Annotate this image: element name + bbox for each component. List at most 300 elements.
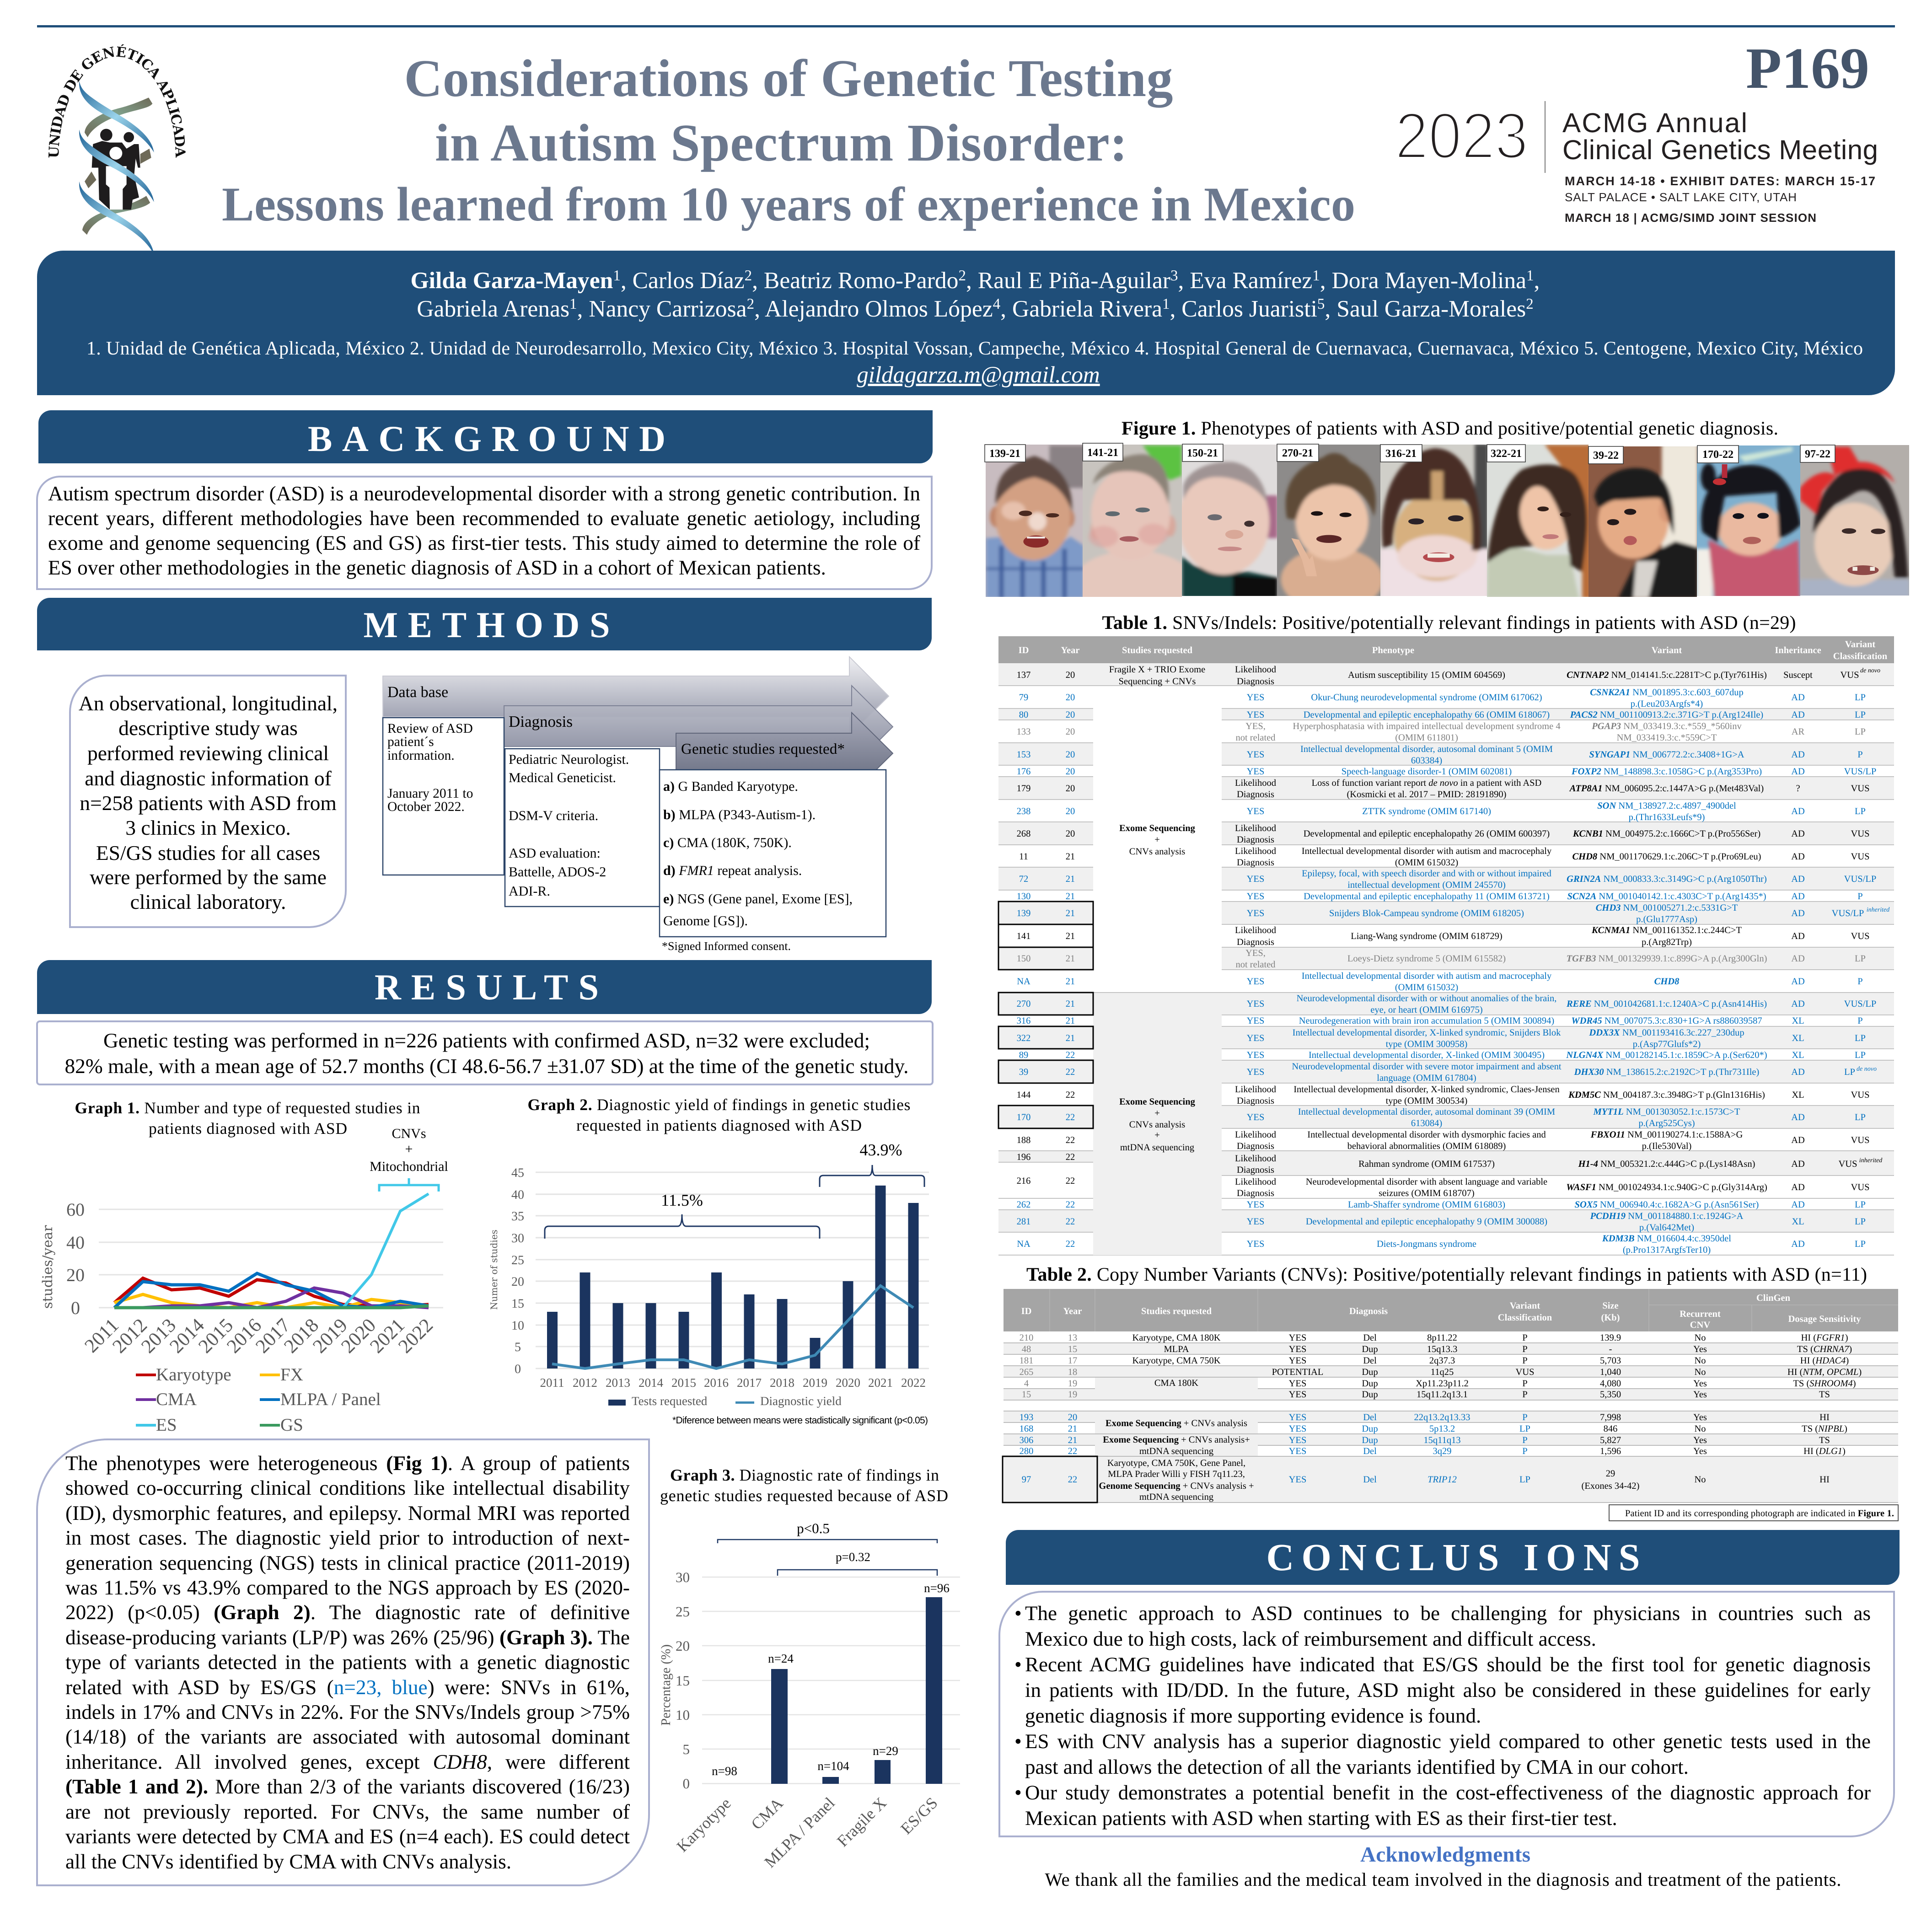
box: diagnosis details: Medical Geneticist. — [509, 770, 616, 785]
graph 2 brace 43.9% — [820, 1141, 924, 1187]
graph 2 title: Graph 2. Diagnostic yield of findings in genetic studies — [528, 1095, 910, 1114]
table 2 header — [1004, 1289, 1898, 1331]
row 280: Yes — [1693, 1446, 1707, 1456]
row 48: P — [1522, 1344, 1528, 1354]
row 79: p.(Leu203Argfs*4) — [1631, 699, 1703, 709]
panel: methods summary — [70, 676, 346, 927]
row 270: RERE NM_001042681.1:c.1240A>C p.(Asn414His) — [1566, 999, 1767, 1009]
graph 1 y axis: 0 — [71, 1298, 80, 1318]
row 130 — [1017, 891, 1863, 902]
row 306 — [1020, 1435, 1830, 1445]
row 281: XL — [1792, 1217, 1804, 1227]
photo 141-21 — [1071, 444, 1197, 623]
text: results narrative: showed co-occurring clinical conditions like intellectual disability — [65, 1476, 630, 1499]
authors banner: Gabriela Arenas — [417, 296, 569, 322]
row 139 — [1017, 903, 1890, 924]
heading: Results: RESULTS — [375, 967, 599, 1008]
graph 3 y axis — [659, 1569, 690, 1792]
panel: methods summary: n=258 patients with ASD from — [80, 791, 337, 815]
logo: Unidad de Genética Aplicada — [46, 43, 188, 255]
row 144 — [1017, 1084, 1870, 1106]
row 72: VUS/LP — [1844, 874, 1876, 884]
row 316: WDR45 NM_007075.3:c.830+1G>A rs886039587 — [1571, 1016, 1762, 1026]
row 179: Diagnosis — [1237, 789, 1274, 800]
graph 2 y axis — [488, 1166, 524, 1376]
row 11: Likelihood — [1235, 846, 1276, 856]
row 137: Suscept — [1783, 670, 1813, 680]
box: diagnosis details: DSM-V criteria. — [509, 808, 598, 823]
photo id labels: 97-22 — [1805, 448, 1830, 460]
row NA 22: 22 — [1066, 1239, 1075, 1249]
row 188: p.(Ile530Val) — [1642, 1141, 1691, 1151]
row 181: No — [1694, 1356, 1706, 1366]
row 48: 15q13.3 — [1427, 1344, 1457, 1354]
table 1 header: Variant — [1652, 645, 1682, 655]
row NA 21: Intellectual developmental disorder with autism and macrocephaly — [1302, 971, 1552, 981]
graph 3 bars — [771, 1597, 942, 1784]
row 193: Yes — [1693, 1412, 1707, 1422]
row 280: HI (DLG1) — [1803, 1446, 1846, 1456]
row 281: p.(Val642Met) — [1639, 1223, 1694, 1233]
graph 3 title: Graph 3. Diagnostic rate of findings in — [670, 1466, 939, 1484]
graph 1 legend: MLPA / Panel — [280, 1390, 381, 1409]
acknowledgments: Acknowledgments — [1360, 1843, 1530, 1867]
row 48: TS (CHRNA7) — [1797, 1344, 1852, 1354]
row 170 — [1017, 1107, 1866, 1128]
row 210: 13 — [1068, 1333, 1077, 1343]
row 176: AD — [1791, 767, 1805, 777]
graph 2 x axis years: 2022 — [901, 1376, 926, 1390]
row 306: P — [1522, 1435, 1528, 1445]
merged cell: exome + CNVs + mtDNA: + — [1154, 1130, 1160, 1140]
row 137: VUS — [1840, 670, 1859, 680]
photo 316-21 — [1380, 444, 1488, 599]
row 188: 188 — [1017, 1135, 1030, 1145]
row 238: ZTTK syndrome (OMIM 617140) — [1362, 806, 1491, 816]
graph 2 x axis years: 2014 — [639, 1376, 663, 1390]
row 270: YES — [1247, 999, 1264, 1009]
graph 3 significance brackets — [718, 1520, 937, 1576]
row 306: TS — [1819, 1435, 1830, 1445]
panel: methods summary: were performed by the same — [90, 865, 327, 889]
row NA 22: AD — [1791, 1239, 1805, 1249]
row 238: AD — [1791, 806, 1805, 816]
row 196: inherited — [1859, 1157, 1883, 1164]
row 139: YES — [1247, 908, 1264, 918]
text: results narrative: related with ASD by ES/GS (n=23, blue) were: SNVs in 61%, — [65, 1676, 630, 1699]
graph 2 x axis years: 2020 — [836, 1376, 860, 1390]
row 193: 22q13.2q13.33 — [1414, 1412, 1470, 1422]
graph 1 x axis years: 2022 — [394, 1315, 437, 1358]
row 130: P — [1857, 891, 1863, 902]
row 144: KDM5C NM_004187.3:c.3948G>T p.(Gln1316His) — [1568, 1090, 1765, 1100]
table 2 header: ClinGen — [1756, 1293, 1791, 1303]
graph 2 legend: Diagnostic yield — [760, 1394, 842, 1408]
row 153: Intellectual developmental disorder, autosomal dominant 5 (OMIM — [1300, 744, 1553, 754]
text: results narrative: inheritance. All involved genes, except CDH8, were different — [65, 1750, 630, 1773]
row 176: 20 — [1066, 767, 1075, 777]
box: genetic studies details: e) NGS (Gene panel, Exome [ES], — [663, 891, 853, 907]
row 150: TGFB3 NM_001329939.1:c.899G>A p.(Arg300Gln) — [1567, 954, 1767, 964]
text: results narrative: are not previously reported. For CNVs, the same number of — [65, 1800, 630, 1823]
row 322: Intellectual developmental disorder, X-linked syndromic, Snijders Blok — [1293, 1028, 1561, 1038]
table 2 header: ID — [1021, 1306, 1031, 1316]
row 188: FBXO11 NM_001190274.1:c.1588A>G — [1590, 1130, 1743, 1140]
affiliations: 1. Unidad de Genética Aplicada, México 2. Unidad de Neurodesarrollo, Mexico City, México 3. Hospital Vossan, Campeche, México 4. Hospital General de Cuernavaca, Cuernavaca, México 5. Centogene, Mexico City, México — [86, 338, 1863, 359]
heading: Conclusions: CONCLUS IONS — [1266, 1536, 1640, 1579]
graph 3 n labels: n=24 — [768, 1652, 794, 1665]
authors: 2 — [958, 268, 966, 284]
photo id labels: 316-21 — [1385, 448, 1417, 460]
box: genetic studies details: b) MLPA (P343-Autism-1). — [663, 807, 816, 822]
text: conclusions list — [1014, 1600, 1871, 1831]
text: background paragraph: ES over other methodologies in the genetic diagnosis of ASD in a cohort of Mexican patients. — [48, 556, 826, 579]
table 2: CNVs — [1003, 1289, 1898, 1503]
row 268: 20 — [1066, 829, 1075, 839]
photo 97-22 — [1800, 444, 1910, 599]
row 97: HI — [1819, 1475, 1830, 1485]
row 170: 22 — [1066, 1112, 1075, 1122]
graph 1 x axis years: 2016 — [223, 1315, 266, 1358]
row 72: 21 — [1066, 874, 1075, 884]
row 48: Dup — [1362, 1344, 1378, 1354]
table 2 header: Variant — [1510, 1301, 1540, 1311]
panel: results summary — [37, 1021, 933, 1084]
row 179: Loss of function variant report de novo in a patient with ASD — [1312, 778, 1541, 788]
ACMG 2023 meeting logo: MARCH 14-18 • EXHIBIT DATES: MARCH 15-17 — [1565, 174, 1875, 188]
row 133: AR — [1792, 727, 1805, 737]
row 133 — [1017, 721, 1866, 743]
row 133: YES, — [1245, 721, 1266, 731]
row 80: YES — [1247, 710, 1264, 720]
text: conclusions list: in patients with ID/DD. In the future, ASD might also be considered in these guidelines for early — [1025, 1679, 1871, 1701]
row NA 22: KDM3B NM_016604.4:c.3950del — [1602, 1234, 1731, 1244]
text: conclusions list: Mexico due to high costs, lack of reimbursement and difficult access. — [1025, 1627, 1596, 1650]
graph 3 x labels: Karyotype — [673, 1794, 735, 1856]
row 281: LP — [1855, 1217, 1866, 1227]
heading: Conclusions — [1006, 1530, 1900, 1585]
row 80: PACS2 NM_001100913.2:c.371G>T p.(Arg124Ile) — [1570, 710, 1763, 720]
row 193: 7,998 — [1600, 1412, 1621, 1422]
row NA 22: YES — [1247, 1239, 1264, 1249]
row 130: YES — [1247, 891, 1264, 902]
row 196: H1-4 NM_005321.2:c.444G>C p.(Lys148Asn) — [1578, 1159, 1755, 1169]
row 48: Yes — [1693, 1344, 1707, 1354]
row 280: YES — [1289, 1446, 1306, 1456]
row 196: Rahman syndrome (OMIM 617537) — [1358, 1159, 1495, 1169]
graph 1 title: patients diagnosed with ASD — [149, 1119, 347, 1138]
graph 3 y axis: 0 — [682, 1776, 690, 1792]
row 280: P — [1522, 1446, 1528, 1456]
graph 3 n labels: n=98 — [712, 1764, 737, 1778]
box: genetic studies details: a) G Banded Karyotype. — [663, 779, 798, 794]
graph 3 x labels: MLPA / Panel — [761, 1793, 838, 1871]
row 89: 89 — [1019, 1050, 1028, 1060]
row 316: YES — [1247, 1016, 1264, 1026]
row 316: Neurodegeneration with brain iron accumulation 5 (OMIM 300894) — [1299, 1016, 1554, 1026]
text: results narrative: disease-producing variants (LP/P) was 26% (25/96) (Graph 3). The — [65, 1626, 630, 1649]
row 150: 21 — [1066, 954, 1075, 964]
row 141: 141 — [1017, 931, 1030, 941]
callout: CNVs + Mitochondrial — [370, 1126, 448, 1191]
table 1 header: Classification — [1833, 651, 1888, 661]
row 72: intellectual development (OMIM 245570) — [1347, 880, 1506, 890]
row 150 — [1017, 948, 1866, 970]
merged cell: exome + CNVs: + — [1154, 835, 1160, 845]
text: results narrative: generation sequencing (NGS) tests in clinical practice (2011-2019) — [65, 1551, 630, 1574]
row 265: 1,040 — [1600, 1367, 1621, 1377]
row 216: VUS — [1851, 1182, 1870, 1192]
text: background paragraph: recent years, different methodologies have been recommended to evaluate genetic aetiology, including — [48, 507, 920, 530]
table 1 header: Year — [1061, 645, 1079, 655]
text: conclusions list: • — [1014, 1781, 1022, 1804]
authors: , Beatriz Romo-Pardo — [752, 268, 958, 294]
panel: methods summary: clinical laboratory. — [130, 890, 286, 913]
row 80: Developmental and epileptic encephalopathy 66 (OMIM 618067) — [1304, 710, 1550, 720]
row 306: 306 — [1020, 1435, 1033, 1445]
heading: Background: BACKGROUND — [308, 419, 665, 459]
merged cell: exome + CNVs + mtDNA: + — [1154, 1108, 1160, 1118]
text: results narrative: (14/18) of the variants are associated with autosomal dominant — [65, 1725, 630, 1748]
table 2 header: (Kb) — [1601, 1313, 1620, 1323]
table 1 row backgrounds — [998, 663, 1894, 1232]
row 268: Developmental and epileptic encephalopathy 26 (OMIM 600397) — [1304, 829, 1550, 839]
row 4: TS (SHROOM4) — [1793, 1379, 1856, 1389]
row 139: AD — [1791, 908, 1805, 918]
graph 2 x axis years: 2012 — [573, 1376, 597, 1390]
row 72 — [1019, 869, 1876, 890]
row 268: Likelihood — [1235, 823, 1276, 833]
row 196: Diagnosis — [1237, 1165, 1274, 1175]
box: data base details: October 2022. — [387, 800, 465, 814]
row 168: LP — [1519, 1424, 1530, 1434]
table 2 header: Classification — [1498, 1313, 1552, 1323]
row 216: seizures (OMIM 618707) — [1379, 1188, 1475, 1198]
panel: methods summary: descriptive study was — [118, 716, 298, 740]
text: conclusions list: Our study demonstrates a potential benefit in the cost-effectiveness of the diagnostic approach for — [1025, 1781, 1871, 1804]
graph 1 y axis: 20 — [66, 1265, 85, 1285]
row 48: MLPA — [1164, 1344, 1189, 1354]
panel: background text box — [37, 477, 932, 589]
graph 1 x axis years: 2012 — [108, 1315, 151, 1358]
row 97: 22 — [1068, 1475, 1077, 1485]
row 153 — [1017, 744, 1863, 766]
row 168: 846 — [1604, 1424, 1617, 1434]
row 281: 22 — [1066, 1217, 1075, 1227]
text: conclusions list: • — [1014, 1730, 1022, 1753]
box: diagnosis details: Battelle, ADOS-2 — [509, 864, 606, 880]
text: conclusions list: • — [1014, 1653, 1022, 1676]
text: conclusions list: The genetic approach to ASD continues to be challenging for physicians in countries such as — [1025, 1602, 1871, 1625]
row 280: 22 — [1068, 1446, 1077, 1456]
text: conclusions list: past and allows the detection of all the variants identified by CMA in our cohort. — [1025, 1755, 1689, 1778]
row 216 — [1017, 1176, 1870, 1198]
row 179: 20 — [1066, 784, 1075, 794]
graph 1 x axis years: 2017 — [252, 1315, 295, 1358]
row 137: Likelihood — [1235, 665, 1276, 675]
row 11: CHD8 NM_001170629.1:c.206C>T p.(Pro69Leu) — [1572, 852, 1761, 862]
row 139: Snijders Blok-Campeau syndrome (OMIM 618205) — [1329, 908, 1524, 918]
row 79: 20 — [1066, 692, 1075, 703]
row 97: LP — [1519, 1475, 1530, 1485]
row 137: Autism susceptibility 15 (OMIM 604569) — [1348, 670, 1505, 680]
row 11: 21 — [1066, 852, 1075, 862]
row 270: Neurodevelopmental disorder with or without anomalies of the brain, — [1297, 993, 1556, 1004]
row 15: Yes — [1693, 1390, 1707, 1400]
row 238: SON NM_138927.2:c.4897_4900del — [1597, 801, 1736, 811]
row 133: LP — [1855, 727, 1866, 737]
photo id labels — [985, 443, 1835, 464]
row 196: VUS — [1838, 1159, 1857, 1169]
graph 2 legend — [608, 1394, 842, 1408]
photo id labels: 150-21 — [1187, 447, 1218, 459]
row 210: YES — [1289, 1333, 1306, 1343]
photo 139-21 — [983, 444, 1085, 599]
row 210: No — [1694, 1333, 1706, 1343]
row 133: PGAP3 NM_033419.3:c.*559_*560inv — [1591, 721, 1742, 731]
row 176: YES — [1247, 767, 1264, 777]
row 4: Xp11.23p11.2 — [1416, 1379, 1469, 1389]
row 196 — [1017, 1152, 1883, 1175]
graph 2 bars — [547, 1186, 918, 1368]
graph 3 y axis: 20 — [676, 1638, 690, 1654]
row 39: 22 — [1066, 1067, 1075, 1077]
row 15: Dup — [1362, 1390, 1378, 1400]
row 181 — [1020, 1356, 1849, 1366]
graph 3 x labels — [673, 1793, 941, 1871]
box: diagnosis details: ASD evaluation: — [509, 846, 601, 861]
graph 1 x axis years: 2020 — [337, 1315, 380, 1358]
row 262: Lamb-Shaffer syndrome (OMIM 616803) — [1348, 1200, 1505, 1210]
graph 1 title: Graph 1. Number and type of requested studies in — [75, 1099, 420, 1117]
box: diagnosis details — [505, 749, 660, 907]
row 11: (OMIM 615032) — [1395, 858, 1458, 868]
panel: conclusions box — [999, 1592, 1894, 1836]
row 322: YES — [1247, 1033, 1264, 1043]
row 150: YES, — [1245, 948, 1266, 958]
row 210: 8p11.22 — [1427, 1333, 1457, 1343]
highlighted patient id boxes — [998, 902, 1093, 1128]
graph 2 x axis years: 2015 — [671, 1376, 696, 1390]
row 188 — [1017, 1130, 1870, 1151]
row 280: 1,596 — [1600, 1446, 1621, 1456]
row 130: 130 — [1017, 891, 1030, 902]
authors banner: , Carlos Juaristi — [1170, 296, 1317, 322]
row 193: Exome Sequencing + CNVs analysis — [1106, 1418, 1247, 1428]
title — [222, 49, 1355, 231]
title: in Autism Spectrum Disorder: — [435, 114, 1127, 172]
merged cell: exome + CNVs — [1093, 686, 1222, 992]
row 210: P — [1522, 1333, 1528, 1343]
photo id labels: 139-21 — [989, 448, 1020, 460]
graph 3 y axis: 5 — [682, 1741, 690, 1757]
panel: results summary: 82% male, with a mean age of 52.7 months (CI 48.6-56.7 ±31.07 SD) at the time of the genetic study. — [65, 1055, 908, 1078]
row 176 — [1017, 767, 1876, 777]
callout: CNVs + Mitochondrial: + — [405, 1142, 413, 1157]
row 210: 139.9 — [1600, 1333, 1621, 1343]
row 188: 22 — [1066, 1135, 1075, 1145]
row 39: DHX30 NM_138615.2:c.2192C>T p.(Thr731Ile) — [1574, 1067, 1759, 1077]
row 270: 21 — [1066, 999, 1075, 1009]
row 139: p.(Glu1777Asp) — [1636, 914, 1697, 924]
row 238: p.(Thr1633Leufs*9) — [1629, 812, 1705, 822]
row 153: YES — [1247, 750, 1264, 760]
merged cell: exome + CNVs: CNVs analysis — [1129, 847, 1185, 857]
photo 39-22 — [1588, 444, 1698, 599]
row 139: 139 — [1017, 908, 1030, 918]
row 306: 15q11q13 — [1423, 1435, 1461, 1445]
top rule — [37, 25, 1895, 27]
text: results narrative: The phenotypes were heterogeneous (Fig 1). A group of patients — [65, 1452, 630, 1475]
row 97: mtDNA sequencing — [1139, 1492, 1213, 1502]
row NA 21: AD — [1791, 977, 1805, 987]
table note — [1609, 1505, 1898, 1521]
row 280 — [1020, 1446, 1846, 1456]
row NA 21: CHD8 — [1654, 977, 1679, 987]
authors banner: , Saul Garza-Morales — [1325, 296, 1526, 322]
row 262: LP — [1855, 1200, 1866, 1210]
graph 3 x labels: CMA — [747, 1794, 787, 1833]
table 2 header: Diagnosis — [1349, 1306, 1388, 1316]
graph 2 x axis years: 2019 — [803, 1376, 827, 1390]
row 153: 603384) — [1411, 756, 1442, 766]
ACMG 2023 meeting logo — [1395, 100, 1878, 225]
acknowledgments: We thank all the families and the medical team involved in the diagnosis and treatment of the patients. — [1045, 1869, 1841, 1890]
table 2 row backgrounds — [1004, 1343, 1898, 1502]
row 130: Developmental and epileptic encephalopathy 11 (OMIM 613721) — [1304, 891, 1550, 902]
row 265: HI (NTM, OPCML) — [1787, 1367, 1862, 1377]
row 280: 3q29 — [1433, 1446, 1452, 1456]
row 188: Likelihood — [1235, 1130, 1276, 1140]
row 265: Dup — [1362, 1367, 1378, 1377]
graph 2 x axis years: 2011 — [540, 1376, 564, 1390]
graph 2 y axis: 45 — [511, 1166, 524, 1180]
row 322: 21 — [1066, 1033, 1075, 1043]
row 11: AD — [1791, 852, 1805, 862]
row 39: LP — [1844, 1067, 1855, 1077]
graph 2 y axis: 40 — [511, 1188, 524, 1202]
box: data base details: information. — [387, 748, 455, 763]
row 181: Del — [1363, 1356, 1377, 1366]
row 133: 20 — [1066, 727, 1075, 737]
ACMG 2023 meeting logo: SALT PALACE • SALT LAKE CITY, UTAH — [1565, 190, 1797, 204]
heading: Methods — [37, 598, 932, 650]
row 137 — [1017, 665, 1880, 687]
row 4: Yes — [1693, 1379, 1707, 1389]
row 144: type (OMIM 300534) — [1386, 1096, 1467, 1106]
row 48: 15 — [1068, 1344, 1077, 1354]
row 265: 11q25 — [1431, 1367, 1454, 1377]
text: results narrative: (ID), dysmorphic features, and epilepsy. Normal MRI was reported — [65, 1502, 630, 1524]
chart: Graph 3 bar chart — [659, 1466, 960, 1871]
row 238: YES — [1247, 806, 1264, 816]
row 265: POTENTIAL — [1272, 1367, 1323, 1377]
row 170: LP — [1855, 1112, 1866, 1122]
graph 1 y axis: studies/year — [40, 1225, 55, 1309]
row 97: Karyotype, CMA 750K, Gene Panel, — [1107, 1458, 1245, 1468]
row NA 21: YES — [1247, 977, 1264, 987]
graph 1 x axis years: 2021 — [366, 1315, 409, 1358]
row 39: de novo — [1857, 1066, 1877, 1073]
photo id labels: 141-21 — [1087, 447, 1118, 459]
row 137: Sequencing + CNVs — [1119, 676, 1196, 687]
photo id labels: 39-22 — [1593, 450, 1619, 462]
graph 1 legend: GS — [280, 1415, 303, 1435]
table 2 header: Recurrent — [1680, 1309, 1721, 1319]
row NA 21: NA — [1017, 977, 1030, 987]
graph 3 n labels — [712, 1581, 950, 1778]
row 270 — [1017, 993, 1876, 1015]
